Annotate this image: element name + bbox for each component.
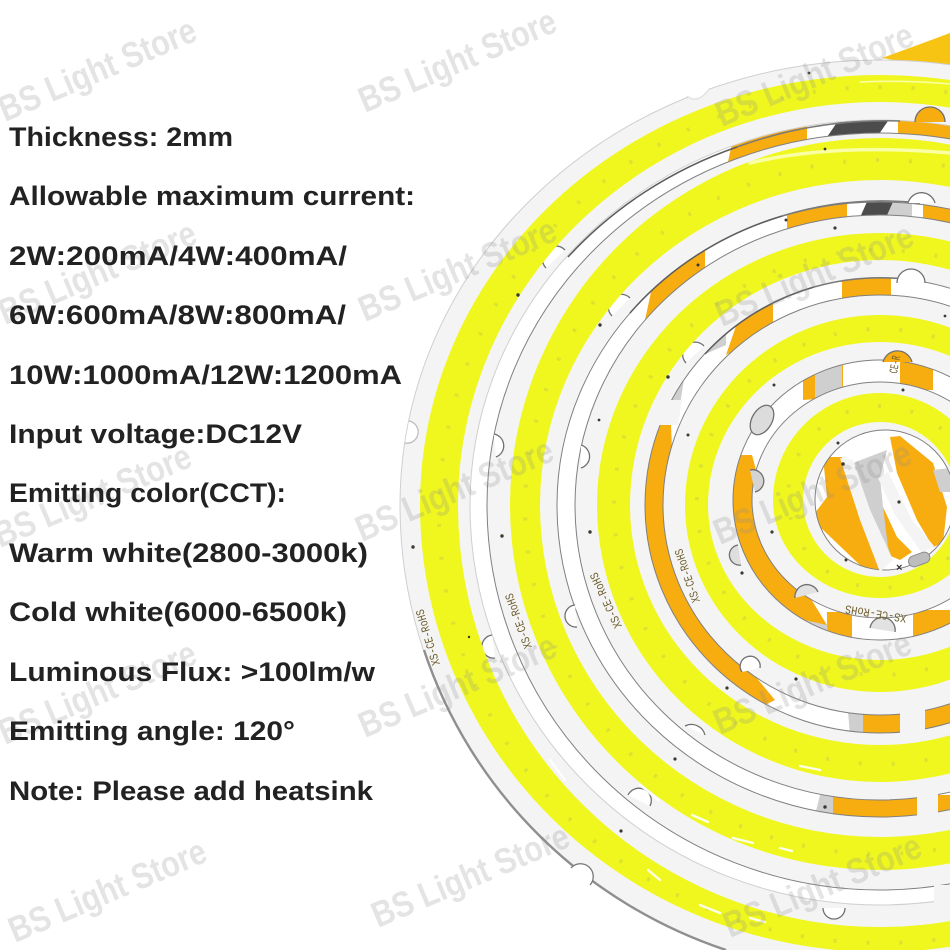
dark stripes in the top gaps xyxy=(825,118,896,222)
edge notches xyxy=(405,88,945,919)
board: ring 5 xyxy=(752,382,950,618)
board: ring 3 xyxy=(575,215,950,800)
silkscreen labels: XS-CE-RoHS xyxy=(672,547,704,604)
watermarks: BS Light Store xyxy=(707,622,917,742)
spec: current heading: Allowable maximum current: xyxy=(9,181,415,211)
silkscreen labels: XS-CE-RoHS xyxy=(413,607,444,667)
yellow emitter: ring 5 xyxy=(773,393,950,598)
watermarks: BS Light Store xyxy=(352,209,562,329)
watermarks: BS Light Store xyxy=(2,830,212,950)
board: ring 4 xyxy=(663,295,950,715)
watermarks: BS Light Store xyxy=(707,432,917,552)
silkscreen labels: XS-CE-RoHS xyxy=(844,601,908,625)
watermarks: BS Light Store xyxy=(352,625,562,745)
spec: cold white: Cold white(6000-6500k) xyxy=(9,597,347,627)
closed sections of the ring gaps xyxy=(640,400,950,915)
yellow emitter: ring 4 xyxy=(685,315,950,692)
illustration: concentric COB LED rings xyxy=(400,33,950,950)
watermarks: BS Light Store xyxy=(709,14,919,134)
spec: current 10W and 12W: 10W:1000mA/12W:1200mA xyxy=(9,360,402,390)
spec: current 2W and 4W: 2W:200mA/4W:400mA/ xyxy=(9,241,348,271)
spec: current 6W and 8W: 6W:600mA/8W:800mA/ xyxy=(9,300,347,330)
spec: warm white: Warm white(2800-3000k) xyxy=(9,538,368,568)
board: ring 2 xyxy=(487,133,950,890)
yellow emitter: ring 3 xyxy=(597,233,950,782)
solder points xyxy=(411,72,946,833)
silver backing strips xyxy=(670,195,950,825)
watermarks: BS Light Store xyxy=(349,429,559,549)
silkscreen labels: XS-CE-RoHS xyxy=(588,570,626,630)
spec: input voltage: Input voltage:DC12V xyxy=(9,419,302,449)
board: ring 1 xyxy=(400,60,950,950)
watermarks: BS Light Store xyxy=(365,815,575,935)
yellow emitter: ring 2 xyxy=(510,138,950,870)
spec: emitting color heading: Emitting color(CCT): xyxy=(9,478,286,508)
centre strips xyxy=(840,458,934,572)
spec: thickness: Thickness: 2mm xyxy=(9,122,233,152)
yellow emitter: ring 1 xyxy=(420,75,950,950)
LED chip dots on the emitters xyxy=(439,87,950,943)
spec: note: Note: Please add heatsink xyxy=(9,776,373,806)
spec: luminous flux: Luminous Flux: >100lm/w xyxy=(9,657,375,687)
dark edges of the ring gaps xyxy=(424,121,920,950)
glossy highlights on the emitters xyxy=(550,81,950,922)
silkscreen labels: XS-CE-RoHS xyxy=(503,591,536,650)
silkscreen labels xyxy=(413,355,908,667)
silkscreen labels: × xyxy=(896,562,902,574)
watermarks: BS Light Store xyxy=(709,214,919,334)
small oval pad in the centre xyxy=(907,551,931,568)
orange backing visible through the ring gaps xyxy=(635,33,950,825)
spec: emitting angle: Emitting angle: 120° xyxy=(9,716,295,746)
silkscreen labels: CE-R xyxy=(887,355,904,375)
panel: specifications text xyxy=(9,122,415,806)
